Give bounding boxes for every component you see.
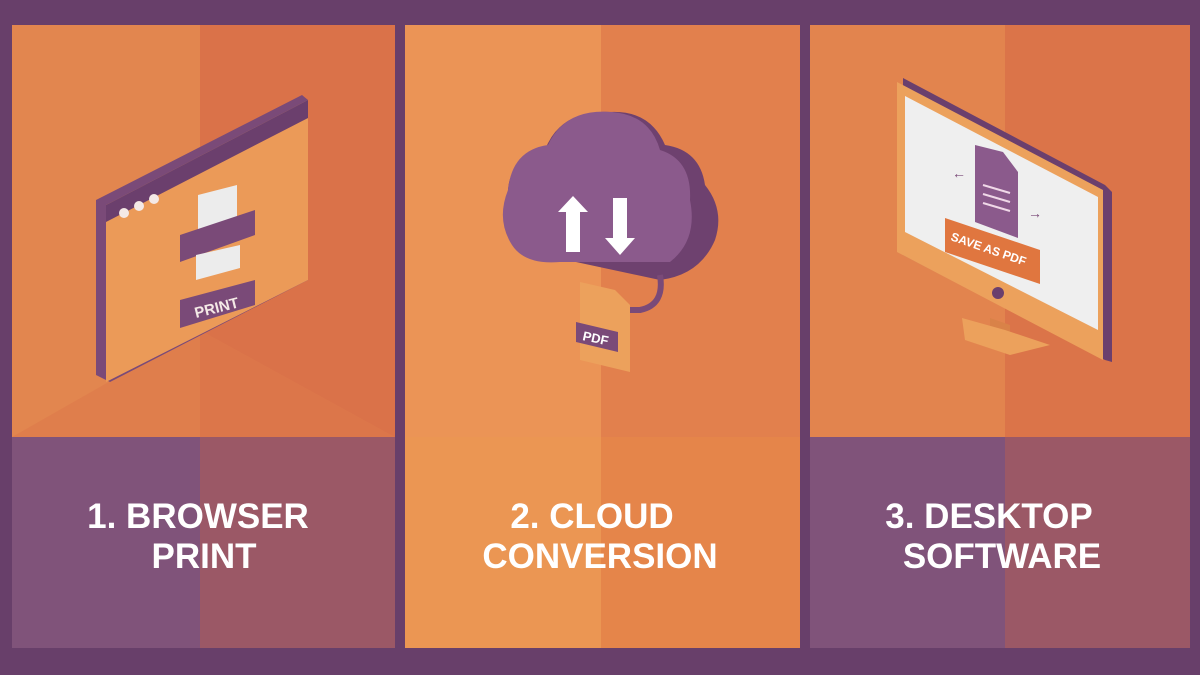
label: PRINT button xyxy=(180,280,255,328)
icon: browser window with printer xyxy=(96,95,308,382)
panel: cloud conversion xyxy=(405,25,800,648)
heading: browser print: 1. BROWSER xyxy=(87,497,309,536)
icon: monitor: → xyxy=(1028,205,1042,221)
icon: monitor: ← xyxy=(952,165,966,181)
label: SAVE AS PDF: SAVE AS PDF xyxy=(949,230,1028,268)
panel: desktop software xyxy=(810,25,1190,648)
label: PRINT button: PRINT xyxy=(193,294,241,322)
panel: browser print: PRINT xyxy=(152,537,256,576)
icon: monitor xyxy=(897,78,1112,362)
icon: PDF file: PDF xyxy=(581,328,610,348)
panel: browser print xyxy=(12,25,395,648)
icon: cloud with arrows xyxy=(503,112,718,372)
heading: desktop software: 3. DESKTOP xyxy=(885,497,1093,536)
label: SAVE AS PDF xyxy=(945,218,1040,284)
panel: cloud conversion: CONVERSION xyxy=(482,537,718,576)
panel: desktop software: SOFTWARE xyxy=(903,537,1101,576)
icon: PDF file xyxy=(576,282,630,372)
heading: cloud conversion: 2. CLOUD xyxy=(510,497,674,536)
